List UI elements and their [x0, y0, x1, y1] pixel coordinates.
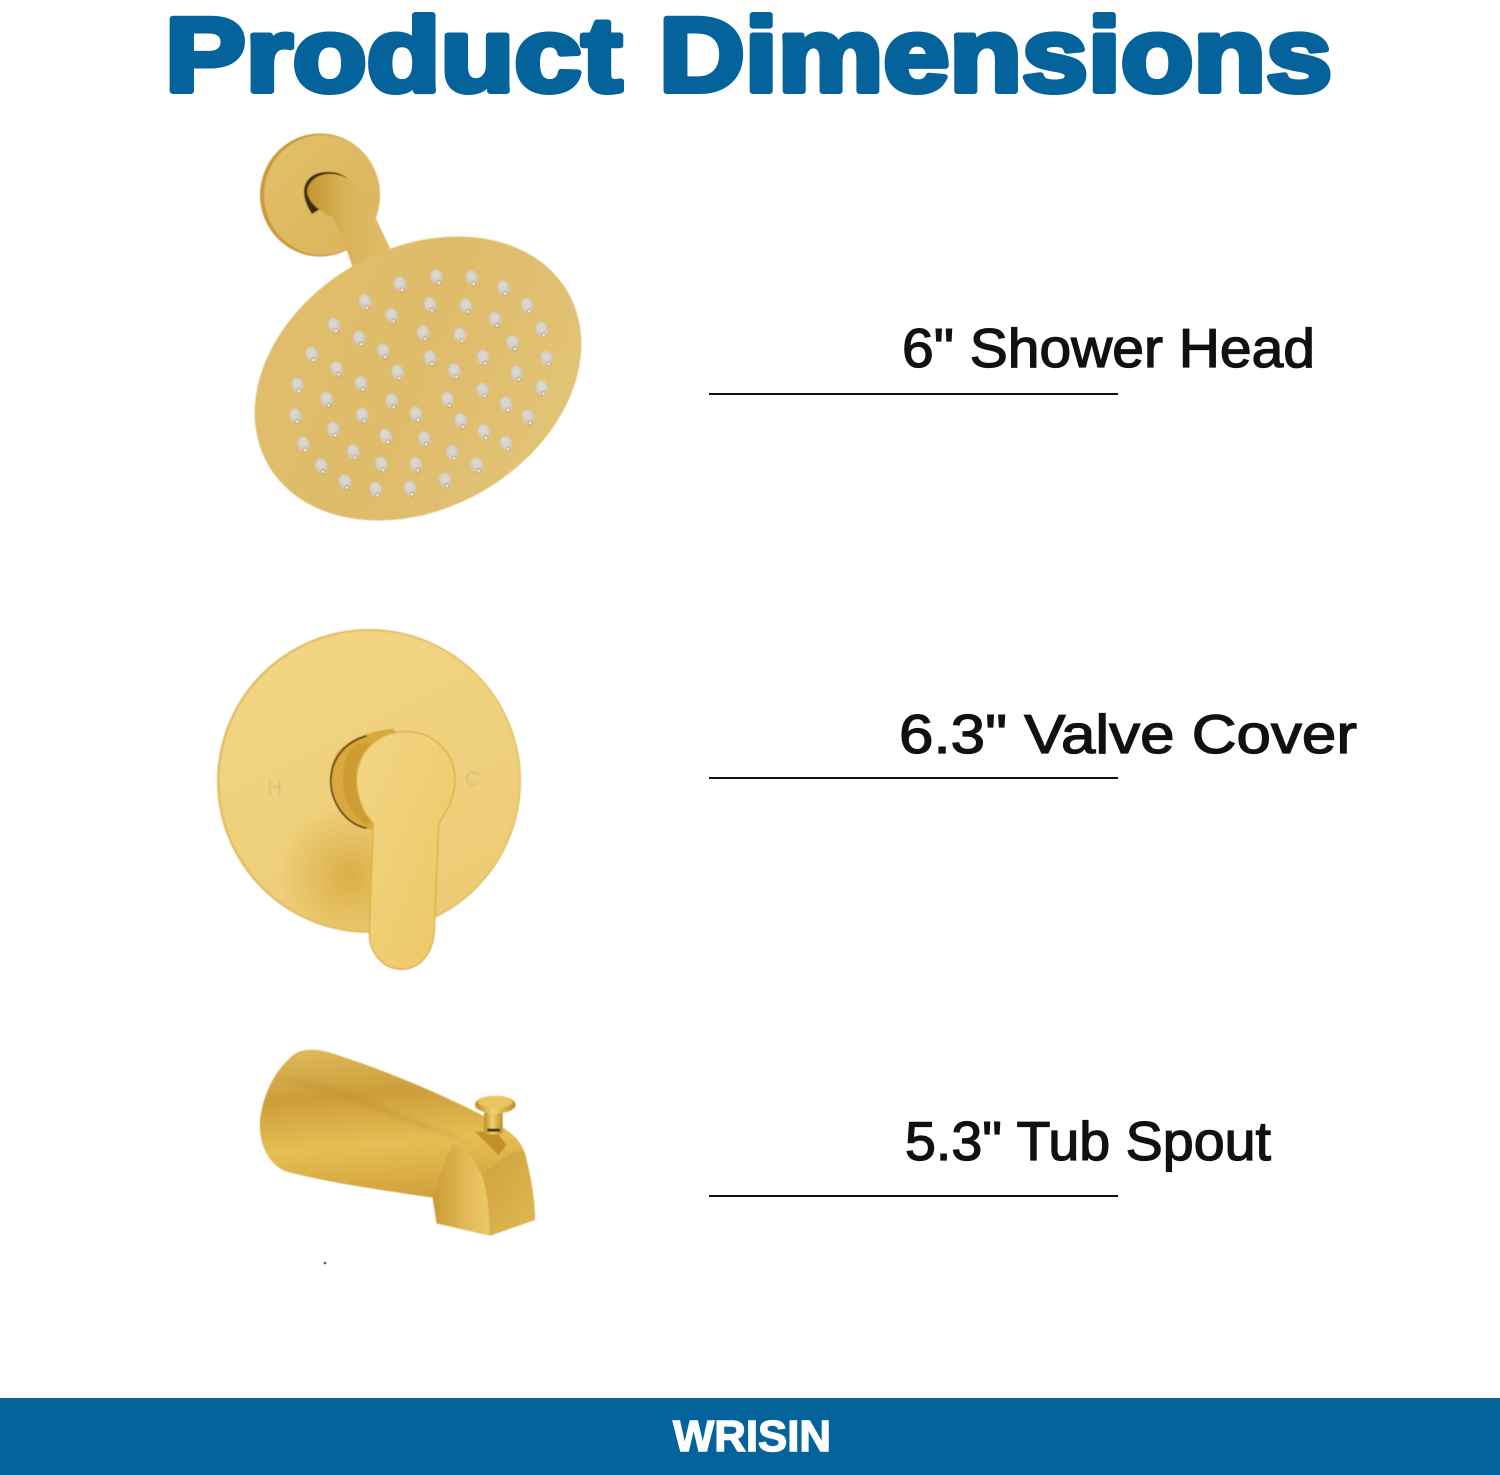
- diverter knob: [475, 1096, 516, 1155]
- lever collar: [330, 729, 407, 830]
- wall flange: [260, 134, 380, 256]
- icon: tub spout: [260, 1050, 535, 1236]
- leader line: [709, 777, 1118, 779]
- cold marker: C: [465, 768, 480, 791]
- lever handle: [357, 732, 455, 969]
- icon: shower head: [203, 134, 633, 578]
- label text: 6" Shower Head: [902, 317, 1315, 379]
- icon: valve cover: [217, 629, 521, 969]
- leader line: [709, 393, 1118, 395]
- title: [165, 0, 1332, 114]
- leader line: [709, 1195, 1118, 1197]
- footer band: [0, 1398, 1500, 1475]
- speck under spout: [324, 1262, 326, 1264]
- spout body: [260, 1050, 535, 1236]
- shower disc: [203, 179, 633, 578]
- shower arm: [304, 172, 391, 266]
- valve plate: [217, 629, 521, 933]
- label text: 6.3" Valve Cover: [899, 703, 1357, 765]
- title: Product: [165, 0, 622, 114]
- title: Dimensions: [659, 0, 1332, 114]
- brand name: WRISIN: [673, 1412, 831, 1461]
- hot marker: H: [267, 777, 282, 800]
- spray nozzles: [288, 268, 554, 498]
- label text: 5.3" Tub Spout: [905, 1110, 1271, 1172]
